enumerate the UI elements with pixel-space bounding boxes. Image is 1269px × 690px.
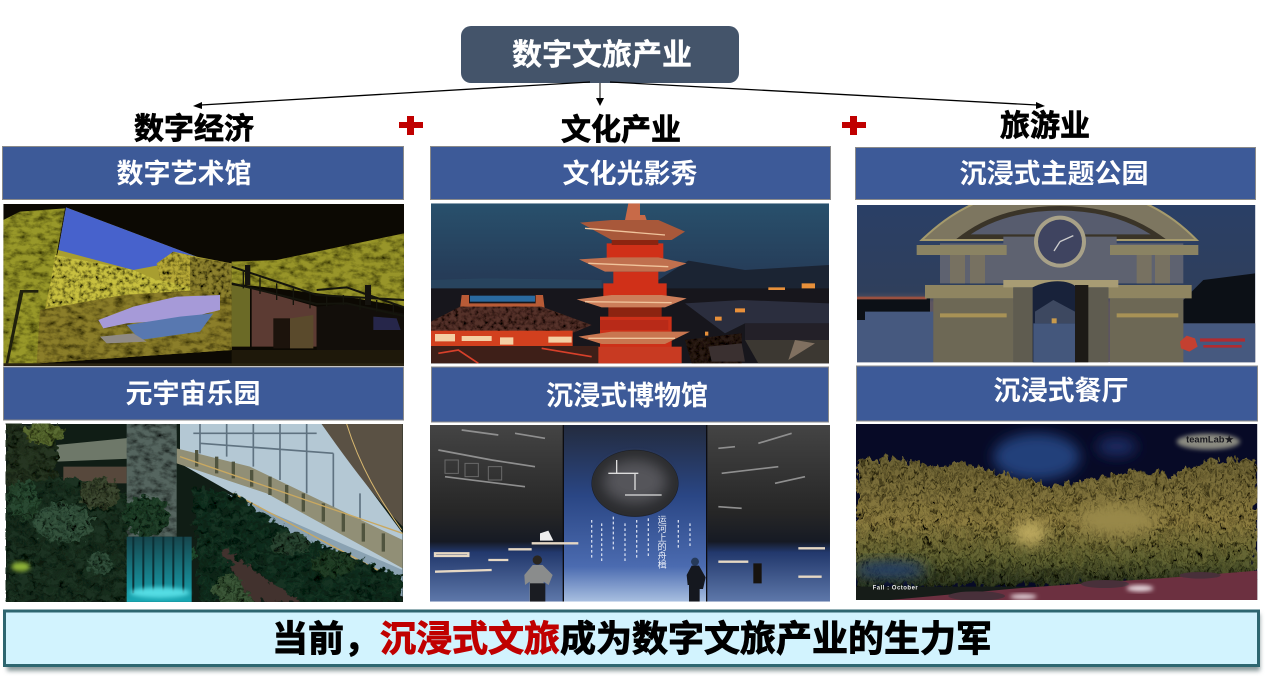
header: 数字艺术馆: 数字艺术馆 <box>116 159 252 189</box>
header: 沉浸式主题公园: 沉浸式主题公园 <box>960 159 1148 189</box>
photo: immersive restaurant <box>853 424 1257 601</box>
photo: immersive museum <box>430 425 830 602</box>
header: 沉浸式博物馆 <box>432 367 828 422</box>
header: 沉浸式餐厅: 沉浸式餐厅 <box>994 376 1128 406</box>
title: 数字文旅产业: 数字文旅产业 <box>512 39 692 72</box>
banner: conclusion <box>4 611 1260 671</box>
figure: visitor right <box>687 558 706 602</box>
header: 沉浸式主题公园 <box>856 148 1256 200</box>
header: 元宇宙乐园: 元宇宙乐园 <box>126 379 260 409</box>
text: Fall October: Fall : October <box>873 585 918 591</box>
header: 沉浸式餐厅 <box>856 366 1258 421</box>
icon: plus <box>842 116 866 135</box>
header: 数字艺术馆 <box>2 146 404 200</box>
photo: metaverse park <box>6 423 403 607</box>
image caption: 运河上的舟楫: 运河上的舟楫 <box>657 515 667 569</box>
arrow: to 文化产业 <box>596 83 604 106</box>
header: 文化光影秀 <box>430 146 830 200</box>
icon: plus <box>399 116 423 135</box>
photo: digital art museum <box>3 204 404 366</box>
panel: 旅游业 column <box>853 148 1258 601</box>
photo: pagoda light show <box>431 203 829 363</box>
text: teamLab logo: teamLab★ <box>1186 435 1234 445</box>
header: 文化光影秀: 文化光影秀 <box>562 159 698 189</box>
heading: 旅游业: 旅游业 <box>1000 110 1090 143</box>
panel: 数字经济 column <box>2 146 404 607</box>
panel: 文化产业 column <box>430 146 830 602</box>
banner: conclusion: 当前，沉浸式文旅成为数字文旅产业的生力军 <box>272 618 992 659</box>
arrow: to 旅游业 <box>610 82 1045 109</box>
heading: 文化产业: 文化产业 <box>561 114 681 147</box>
heading: 数字经济: 数字经济 <box>134 113 254 146</box>
photo: theme park clock tower <box>857 205 1256 362</box>
header: 沉浸式博物馆: 沉浸式博物馆 <box>546 381 708 411</box>
title: 数字文旅产业 <box>461 26 739 83</box>
header: 元宇宙乐园 <box>4 367 404 420</box>
figure: visitor left <box>524 555 553 602</box>
arrow: to 数字经济 <box>193 82 590 109</box>
